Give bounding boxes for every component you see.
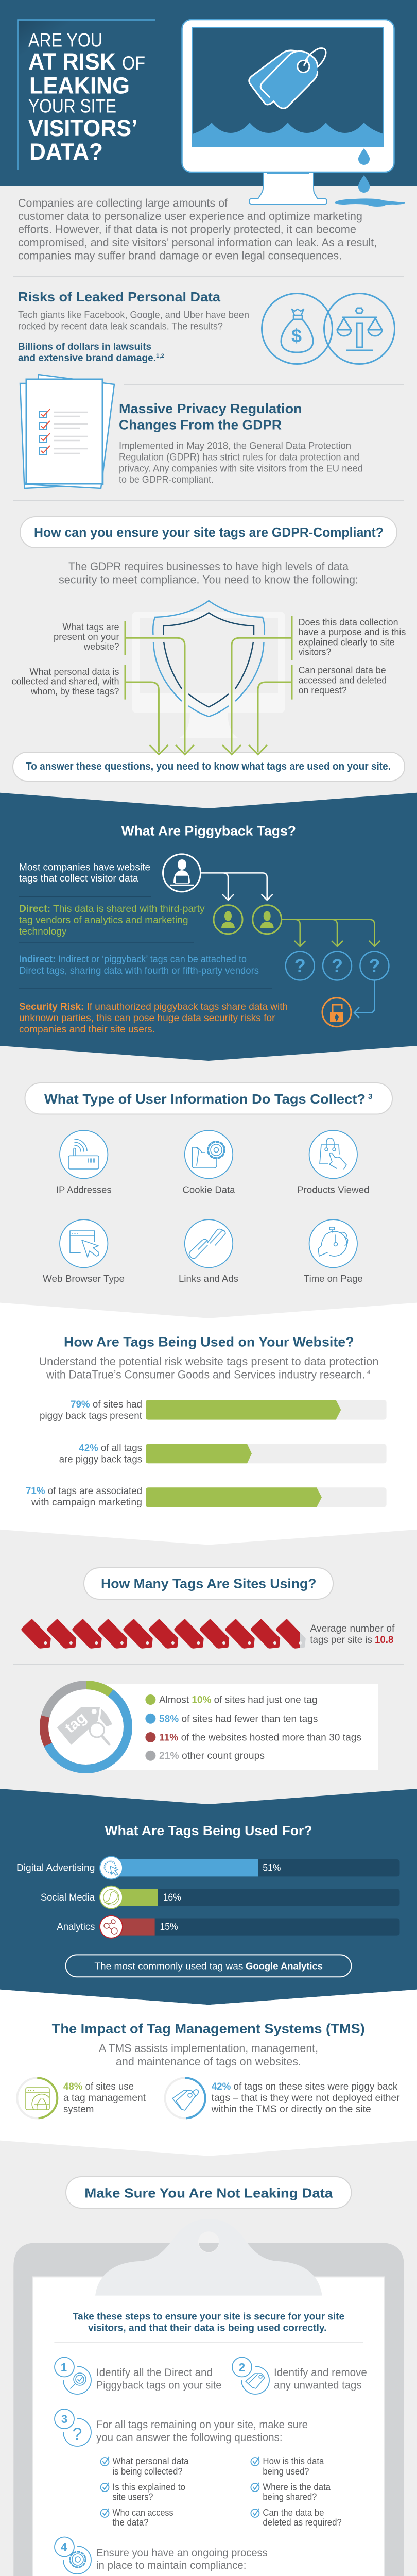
intro text: companies may suffer brand damage or even legal consequences. bbox=[18, 249, 342, 262]
title bbox=[18, 20, 155, 170]
bar: 71%: with campaign marketing bbox=[31, 1497, 142, 1508]
callout pill: answer bbox=[13, 745, 405, 781]
icon: scales bbox=[324, 294, 394, 364]
text: intro: Most companies have website bbox=[19, 862, 150, 873]
label: products viewed: Products Viewed bbox=[297, 1184, 370, 1195]
callout: billions: and extensive brand damage. bbox=[18, 353, 156, 364]
text: left questions: What tags are bbox=[63, 621, 119, 632]
text: security risk: companies and their site users. bbox=[19, 1024, 155, 1035]
text: right questions: Does this data collection bbox=[299, 617, 398, 628]
stat: 42% of tags: within the TMS or directly on the site bbox=[211, 2104, 371, 2115]
icon: checklist documents bbox=[20, 375, 114, 488]
icon: question mark: ? bbox=[73, 2425, 82, 2444]
text: average bbox=[310, 1623, 395, 1646]
pictogram: average tags per site bbox=[21, 1619, 395, 1649]
heading: tags used: How Are Tags Being Used on Your Website? bbox=[64, 1334, 354, 1349]
intro text: Companies are collecting large amounts of bbox=[18, 197, 228, 209]
text: GDPR requirement: The GDPR requires businesses to have high levels of data bbox=[68, 560, 349, 573]
legend: Almost 10% of sites had just one tag bbox=[159, 1695, 317, 1706]
icon: cookie data bbox=[185, 1130, 233, 1179]
intro text bbox=[18, 197, 377, 262]
bar: 79%: 79% of sites had bbox=[71, 1399, 142, 1410]
panel: what type of user information bbox=[25, 1083, 392, 1284]
panel: piggyback tags bbox=[0, 793, 417, 1061]
text: intro bbox=[73, 2311, 344, 2334]
hero banner bbox=[0, 0, 417, 207]
text: risks body: rocked by recent data leak scandals. The results? bbox=[18, 321, 223, 332]
icon: direct tag vendors bbox=[214, 905, 282, 934]
callout pill: answer: To answer these questions, you need to know what tags are used on your site. bbox=[26, 761, 391, 772]
stat: 48% of sites: a tag management bbox=[63, 2093, 146, 2104]
bar: digital advertising: Digital Advertising bbox=[16, 1863, 95, 1874]
heading pill: how many tags bbox=[84, 1568, 333, 1599]
label: web browser type: Web Browser Type bbox=[43, 1273, 125, 1284]
text: right questions bbox=[299, 617, 406, 696]
intro text: efforts. However, if that data is not properly protected, it can become bbox=[18, 223, 356, 236]
bar: 42%: are piggy back tags bbox=[59, 1454, 142, 1465]
panel: impact of TMS bbox=[0, 1990, 417, 2156]
title: LEAKING bbox=[29, 73, 130, 99]
legend: 21% other count groups bbox=[159, 1751, 265, 1761]
checklist: questions: the data? bbox=[112, 2517, 148, 2528]
step 1: Piggyback tags on your site bbox=[96, 2380, 221, 2392]
heading pill: not leaking data bbox=[66, 2177, 351, 2208]
icon: drops and puddle bbox=[335, 148, 405, 207]
stat: 48% of sites bbox=[17, 2078, 146, 2118]
text: security risk: Security Risk: If unauthorized piggyback tags share data with bbox=[19, 1002, 288, 1012]
diagram: shield and questions bbox=[11, 601, 406, 781]
icon: time on page bbox=[309, 1219, 357, 1267]
text: GDPR requirement bbox=[59, 560, 358, 586]
icon: gear bbox=[70, 2552, 85, 2567]
step 1 bbox=[55, 2357, 221, 2394]
heading: used for: What Are Tags Being Used For? bbox=[105, 1823, 312, 1838]
step 2: Identify and remove bbox=[274, 2367, 367, 2379]
arrows: green bbox=[282, 920, 380, 946]
text: security risk: unknown parties, this can pose huge data security risks for bbox=[19, 1013, 275, 1024]
text: left questions: whom, by these tags? bbox=[30, 686, 119, 697]
bar: digital advertising: 51% bbox=[263, 1863, 281, 1874]
text: right questions: explained clearly to site bbox=[299, 637, 395, 647]
checklist: questions: site users? bbox=[112, 2492, 153, 2502]
stat: 42% of tags bbox=[165, 2078, 400, 2118]
label: IP addresses: IP Addresses bbox=[56, 1184, 111, 1195]
step 3 bbox=[55, 2409, 308, 2446]
text: TMS description: and maintenance of tags on websites. bbox=[116, 2055, 301, 2068]
bar chart: tag usage bbox=[26, 1399, 387, 1508]
legend bbox=[145, 1694, 361, 1761]
text: right questions: on request? bbox=[299, 685, 347, 696]
text: TMS description bbox=[99, 2042, 318, 2068]
icon: tag and magnifier: tag bbox=[62, 1709, 90, 1736]
callout pill: google analytics: The most commonly used tag was bbox=[94, 1961, 243, 1971]
heading pill: user information: What Type of User Information Do Tags Collect? bbox=[44, 1091, 366, 1107]
panel: how tags are used bbox=[0, 1303, 417, 1545]
stat: 48% of sites: 48% of sites use bbox=[63, 2081, 134, 2092]
icon: links and ads bbox=[185, 1219, 233, 1267]
chart panel: tag count donut bbox=[44, 1684, 378, 1770]
heading: regulation: Massive Privacy Regulation bbox=[119, 401, 302, 416]
text: left questions: website? bbox=[83, 641, 119, 652]
panel: what are tags used for bbox=[0, 1789, 417, 2005]
step 4: 4 bbox=[61, 2541, 67, 2553]
icon: unknown piggyback vendors: ? bbox=[332, 955, 343, 976]
icon: unknown piggyback vendors: ? bbox=[294, 955, 306, 976]
checklist: questions: being used? bbox=[263, 2466, 309, 2477]
heading: TMS: The Impact of Tag Management Systems (TMS) bbox=[52, 2021, 365, 2036]
panel: clipboard checklist bbox=[13, 2219, 404, 2576]
step 3: you can answer the following questions: bbox=[96, 2432, 283, 2444]
text: GDPR requirement: security to meet compliance. You need to know the following: bbox=[59, 573, 358, 586]
icon: price tag bbox=[249, 48, 326, 108]
legend: 11% of the websites hosted more than 30 tags bbox=[159, 1733, 361, 1743]
icon: products viewed bbox=[309, 1130, 357, 1179]
callout pill: google analytics bbox=[66, 1955, 351, 1977]
bar: digital advertising bbox=[16, 1857, 399, 1879]
bar: social media bbox=[41, 1886, 399, 1909]
callout: billions: Billions of dollars in lawsuits bbox=[18, 342, 151, 352]
step 4: in place to maintain compliance: bbox=[96, 2560, 246, 2571]
step 1: Identify all the Direct and bbox=[96, 2367, 213, 2379]
heading pill: user information bbox=[25, 1083, 392, 1114]
panel: risks of leaked personal data bbox=[18, 289, 394, 364]
checklist: questions: Who can access bbox=[112, 2507, 173, 2518]
arrow: blue bbox=[354, 980, 374, 1018]
checklist: questions: deleted as required? bbox=[263, 2517, 342, 2528]
checklist: questions: Where is the data bbox=[263, 2482, 331, 2492]
bar: 42% bbox=[59, 1443, 387, 1465]
text: intro bbox=[19, 862, 150, 884]
bar: social media: Social Media bbox=[41, 1892, 95, 1903]
checklist: questions bbox=[101, 2456, 342, 2528]
bar: 79% bbox=[40, 1399, 387, 1421]
icon: leaking monitor bbox=[182, 20, 405, 207]
text: risks body bbox=[18, 310, 249, 332]
text: industry research bbox=[39, 1355, 378, 1381]
text: TMS description: A TMS assists implementation, management, bbox=[99, 2042, 318, 2055]
step 2: 2 bbox=[239, 2361, 245, 2374]
text: intro: Take these steps to ensure your site is secure for your site bbox=[73, 2311, 344, 2323]
checklist: questions: Can the data be bbox=[263, 2507, 324, 2518]
icon: double tag bbox=[172, 2090, 198, 2110]
text: risks body: Tech giants like Facebook, Google, and Uber have been bbox=[18, 310, 249, 320]
text: left questions: present on your bbox=[54, 631, 119, 642]
text: intro: visitors, and that their data is being used correctly. bbox=[88, 2323, 326, 2334]
text: right questions: visitors? bbox=[299, 646, 331, 657]
checklist: questions: is being collected? bbox=[112, 2466, 182, 2477]
heading pill: user information: 3 bbox=[368, 1092, 372, 1101]
text: regulation body: Regulation (GDPR) has strict rules for data protection and bbox=[119, 452, 359, 463]
donut chart bbox=[44, 1685, 128, 1769]
stat: 42% of tags: 42% of tags on these sites were piggy back bbox=[212, 2081, 398, 2092]
step 3: For all tags remaining on your site, make sure bbox=[96, 2419, 308, 2431]
title: AT RISK bbox=[28, 48, 116, 75]
intro text: customer data to personalize user experience and optimize marketing bbox=[18, 210, 362, 223]
bar: social media: 16% bbox=[163, 1892, 181, 1903]
text: regulation body: Implemented in May 2018, the General Data Protection bbox=[119, 440, 351, 451]
icon: clipboard clip bbox=[95, 2243, 322, 2296]
text: intro: tags that collect visitor data bbox=[19, 873, 138, 884]
heading: piggyback: What Are Piggyback Tags? bbox=[121, 823, 296, 838]
icon: broken lock bbox=[322, 998, 351, 1027]
step 4: Ensure you have an ongoing process bbox=[96, 2547, 268, 2559]
text: left questions: collected and shared, with bbox=[11, 676, 119, 687]
legend: 58% of sites had fewer than ten tags bbox=[159, 1714, 318, 1724]
checklist: questions: Is this explained to bbox=[112, 2482, 185, 2492]
text: indirect bbox=[19, 954, 259, 976]
icon: tag and magnifier bbox=[57, 1707, 113, 1745]
text: direct: Direct: This data is shared with third-party bbox=[19, 904, 205, 914]
label: time on page: Time on Page bbox=[304, 1273, 363, 1284]
checklist: questions: How is this data bbox=[263, 2456, 324, 2466]
label: links and ads: Links and Ads bbox=[179, 1273, 238, 1284]
icon: unknown piggyback vendors bbox=[286, 951, 389, 980]
heading pill: how many tags: How Many Tags Are Sites Using? bbox=[101, 1576, 316, 1591]
text: regulation body: to be GDPR-compliant. bbox=[119, 474, 214, 485]
flow diagram bbox=[163, 854, 389, 1027]
text: security risk bbox=[19, 1002, 288, 1035]
heading pill: GDPR-compliant: How can you ensure your site tags are GDPR-Compliant? bbox=[34, 524, 384, 540]
heading: regulation: Changes From the GDPR bbox=[119, 417, 282, 433]
icon: shield bbox=[153, 601, 265, 717]
text: regulation body: privacy. Any companies with site visitors from the EU need bbox=[119, 463, 363, 474]
bar: 71%: 71% of tags are associated bbox=[26, 1486, 142, 1497]
step 3: 3 bbox=[61, 2413, 67, 2426]
heading: regulation bbox=[119, 401, 302, 433]
step 1: 1 bbox=[61, 2361, 67, 2374]
text: industry research: with DataTrue’s Consumer Goods and Services industry research. bbox=[46, 1368, 365, 1381]
arrows: green connectors bbox=[125, 616, 292, 754]
title: DATA? bbox=[29, 139, 103, 165]
bar: 71% bbox=[26, 1486, 387, 1508]
bar: 79%: piggy back tags present bbox=[40, 1411, 143, 1421]
bar: analytics bbox=[57, 1916, 399, 1938]
title: YOUR SITE bbox=[28, 95, 116, 116]
intro text: compromised, and site visitors’ personal information can leak. As a result, bbox=[18, 236, 377, 249]
text: average: tags per site is 10.8 bbox=[310, 1635, 393, 1646]
panel: privacy regulation bbox=[20, 375, 404, 488]
text: direct: tag vendors of analytics and marketing bbox=[19, 915, 188, 926]
icon: unknown piggyback vendors: ? bbox=[369, 955, 380, 976]
icon: tag bbox=[246, 2374, 265, 2388]
callout: billions: 1,2 bbox=[156, 353, 164, 359]
step 2 bbox=[232, 2357, 367, 2394]
heading pill: not leaking data: Make Sure You Are Not Leaking Data bbox=[84, 2185, 333, 2200]
icon: web browser type bbox=[60, 1219, 108, 1267]
checklist: questions: being shared? bbox=[263, 2492, 317, 2502]
text: industry research: 4 bbox=[367, 1369, 370, 1376]
text: left questions: What personal data is bbox=[30, 666, 119, 677]
checklist: questions: What personal data bbox=[112, 2456, 189, 2466]
icon: IP addresses bbox=[60, 1130, 108, 1179]
heading: risks: Risks of Leaked Personal Data bbox=[18, 289, 221, 304]
arrows: white bbox=[201, 873, 273, 900]
icon: money bag: $ bbox=[291, 325, 302, 346]
bar: analytics: 15% bbox=[160, 1922, 178, 1933]
title: OF bbox=[122, 53, 145, 74]
title: ARE YOU bbox=[28, 29, 102, 50]
bar: 42%: 42% of all tags bbox=[79, 1443, 142, 1453]
text: direct bbox=[19, 904, 205, 937]
title: VISITORS’ bbox=[28, 115, 137, 141]
icon: magnifier check bbox=[71, 2373, 86, 2388]
icon: browser and globe bbox=[26, 2088, 49, 2110]
text: regulation body bbox=[119, 440, 363, 485]
callout: billions bbox=[18, 342, 164, 364]
text: right questions: have a purpose and is this bbox=[299, 626, 406, 637]
text: indirect: Direct tags, sharing data with fourth or fifth-party vendors bbox=[19, 965, 259, 976]
stat: 48% of sites: system bbox=[63, 2104, 94, 2115]
icon: money bag bbox=[262, 294, 333, 364]
step 2: any unwanted tags bbox=[274, 2380, 361, 2392]
text: right questions: Can personal data be bbox=[299, 665, 386, 675]
label: cookie data: Cookie Data bbox=[182, 1184, 235, 1195]
bar: analytics: Analytics bbox=[57, 1922, 95, 1933]
icon: ghost monitor bbox=[132, 612, 285, 738]
icon: person at laptop bbox=[163, 854, 201, 892]
text: left questions bbox=[11, 621, 119, 697]
text: right questions: accessed and deleted bbox=[299, 675, 387, 685]
heading pill: GDPR-compliant bbox=[20, 517, 397, 548]
text: average: Average number of bbox=[310, 1623, 395, 1634]
callout pill: google analytics: Google Analytics bbox=[246, 1961, 323, 1971]
stat: 42% of tags: tags – that is they were not deployed either bbox=[212, 2093, 400, 2104]
text: indirect: Indirect: Indirect or ‘piggyback’ tags can be attached to bbox=[19, 954, 247, 965]
text: industry research: Understand the potential risk website tags present to data protection bbox=[39, 1355, 378, 1368]
step 4 bbox=[55, 2537, 268, 2574]
text: direct: technology bbox=[19, 926, 67, 937]
